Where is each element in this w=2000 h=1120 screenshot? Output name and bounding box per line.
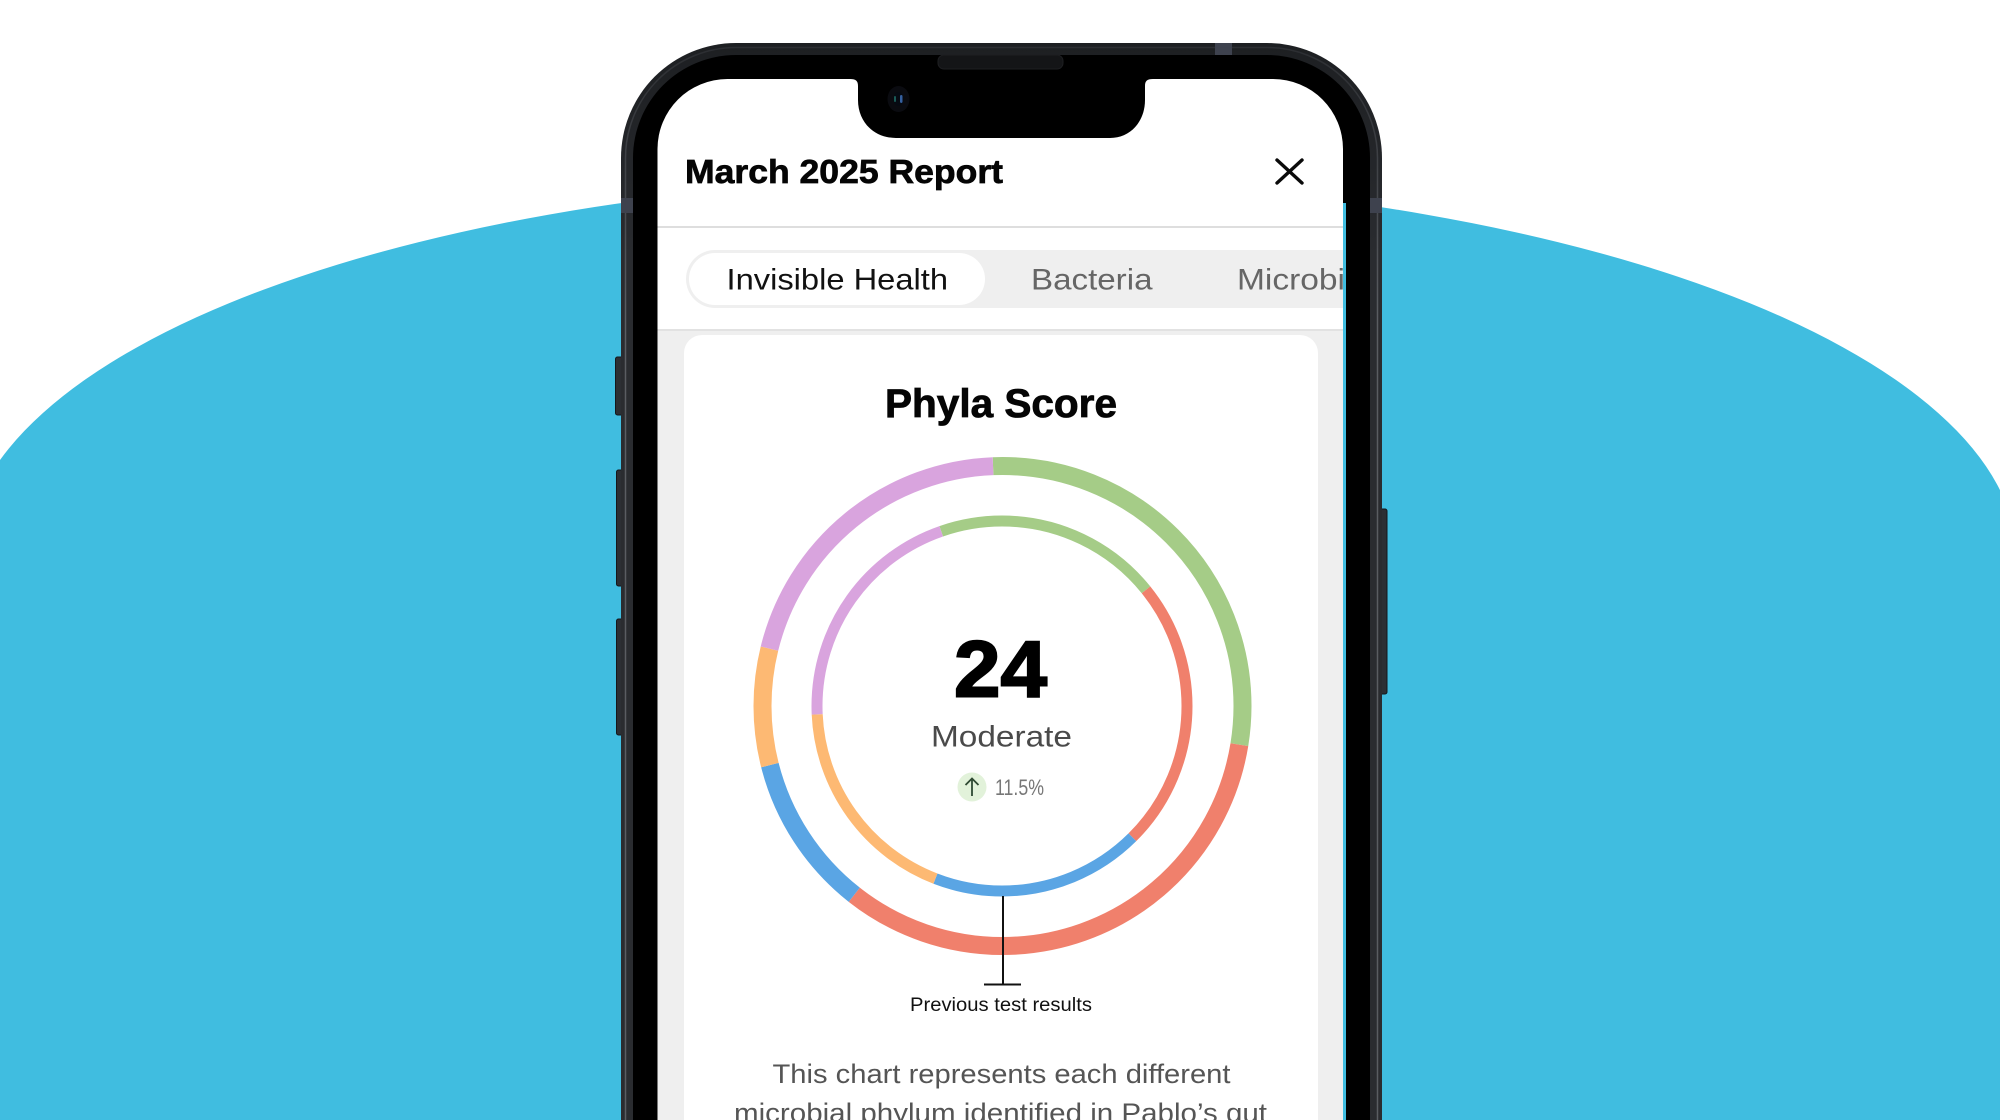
tab bar [686,250,1386,308]
report header divider [658,226,1344,228]
icon: up arrow badge [958,772,986,802]
card [684,335,1318,1120]
change percentage: 11.5% [995,775,1044,800]
phone frame [621,43,1382,1120]
icon: camera [888,86,910,112]
score value: 24 [954,624,1048,714]
active tab pill [689,253,985,305]
callout label: Previous test results [910,995,1092,1016]
inner ring: previous results [817,521,1187,891]
description text [734,1059,1268,1120]
description text: This chart represents each different [772,1059,1231,1089]
tab: Bacteria: Bacteria [1031,264,1153,296]
callout marker: previous test results [984,896,1021,984]
phone mockup [616,43,1387,1120]
score label: Moderate [931,720,1072,754]
bezel gap showing background [1343,203,1346,1120]
outer ring: current results [762,466,1242,946]
speaker [938,55,1063,69]
notch [850,76,1153,138]
antenna bands [621,43,1382,213]
content background [658,330,1344,1120]
tab: Invisible Health: Invisible Health [726,264,948,296]
chart: phyla score rings [762,466,1242,946]
report title: March 2025 Report [685,153,1003,190]
phone screen [658,79,1386,1120]
card heading: Phyla Score: Phyla Score [885,382,1117,426]
icon: close [1277,160,1302,183]
side buttons [616,357,1387,735]
tab: Microbiome (cut off): Microbi [1237,264,1345,296]
